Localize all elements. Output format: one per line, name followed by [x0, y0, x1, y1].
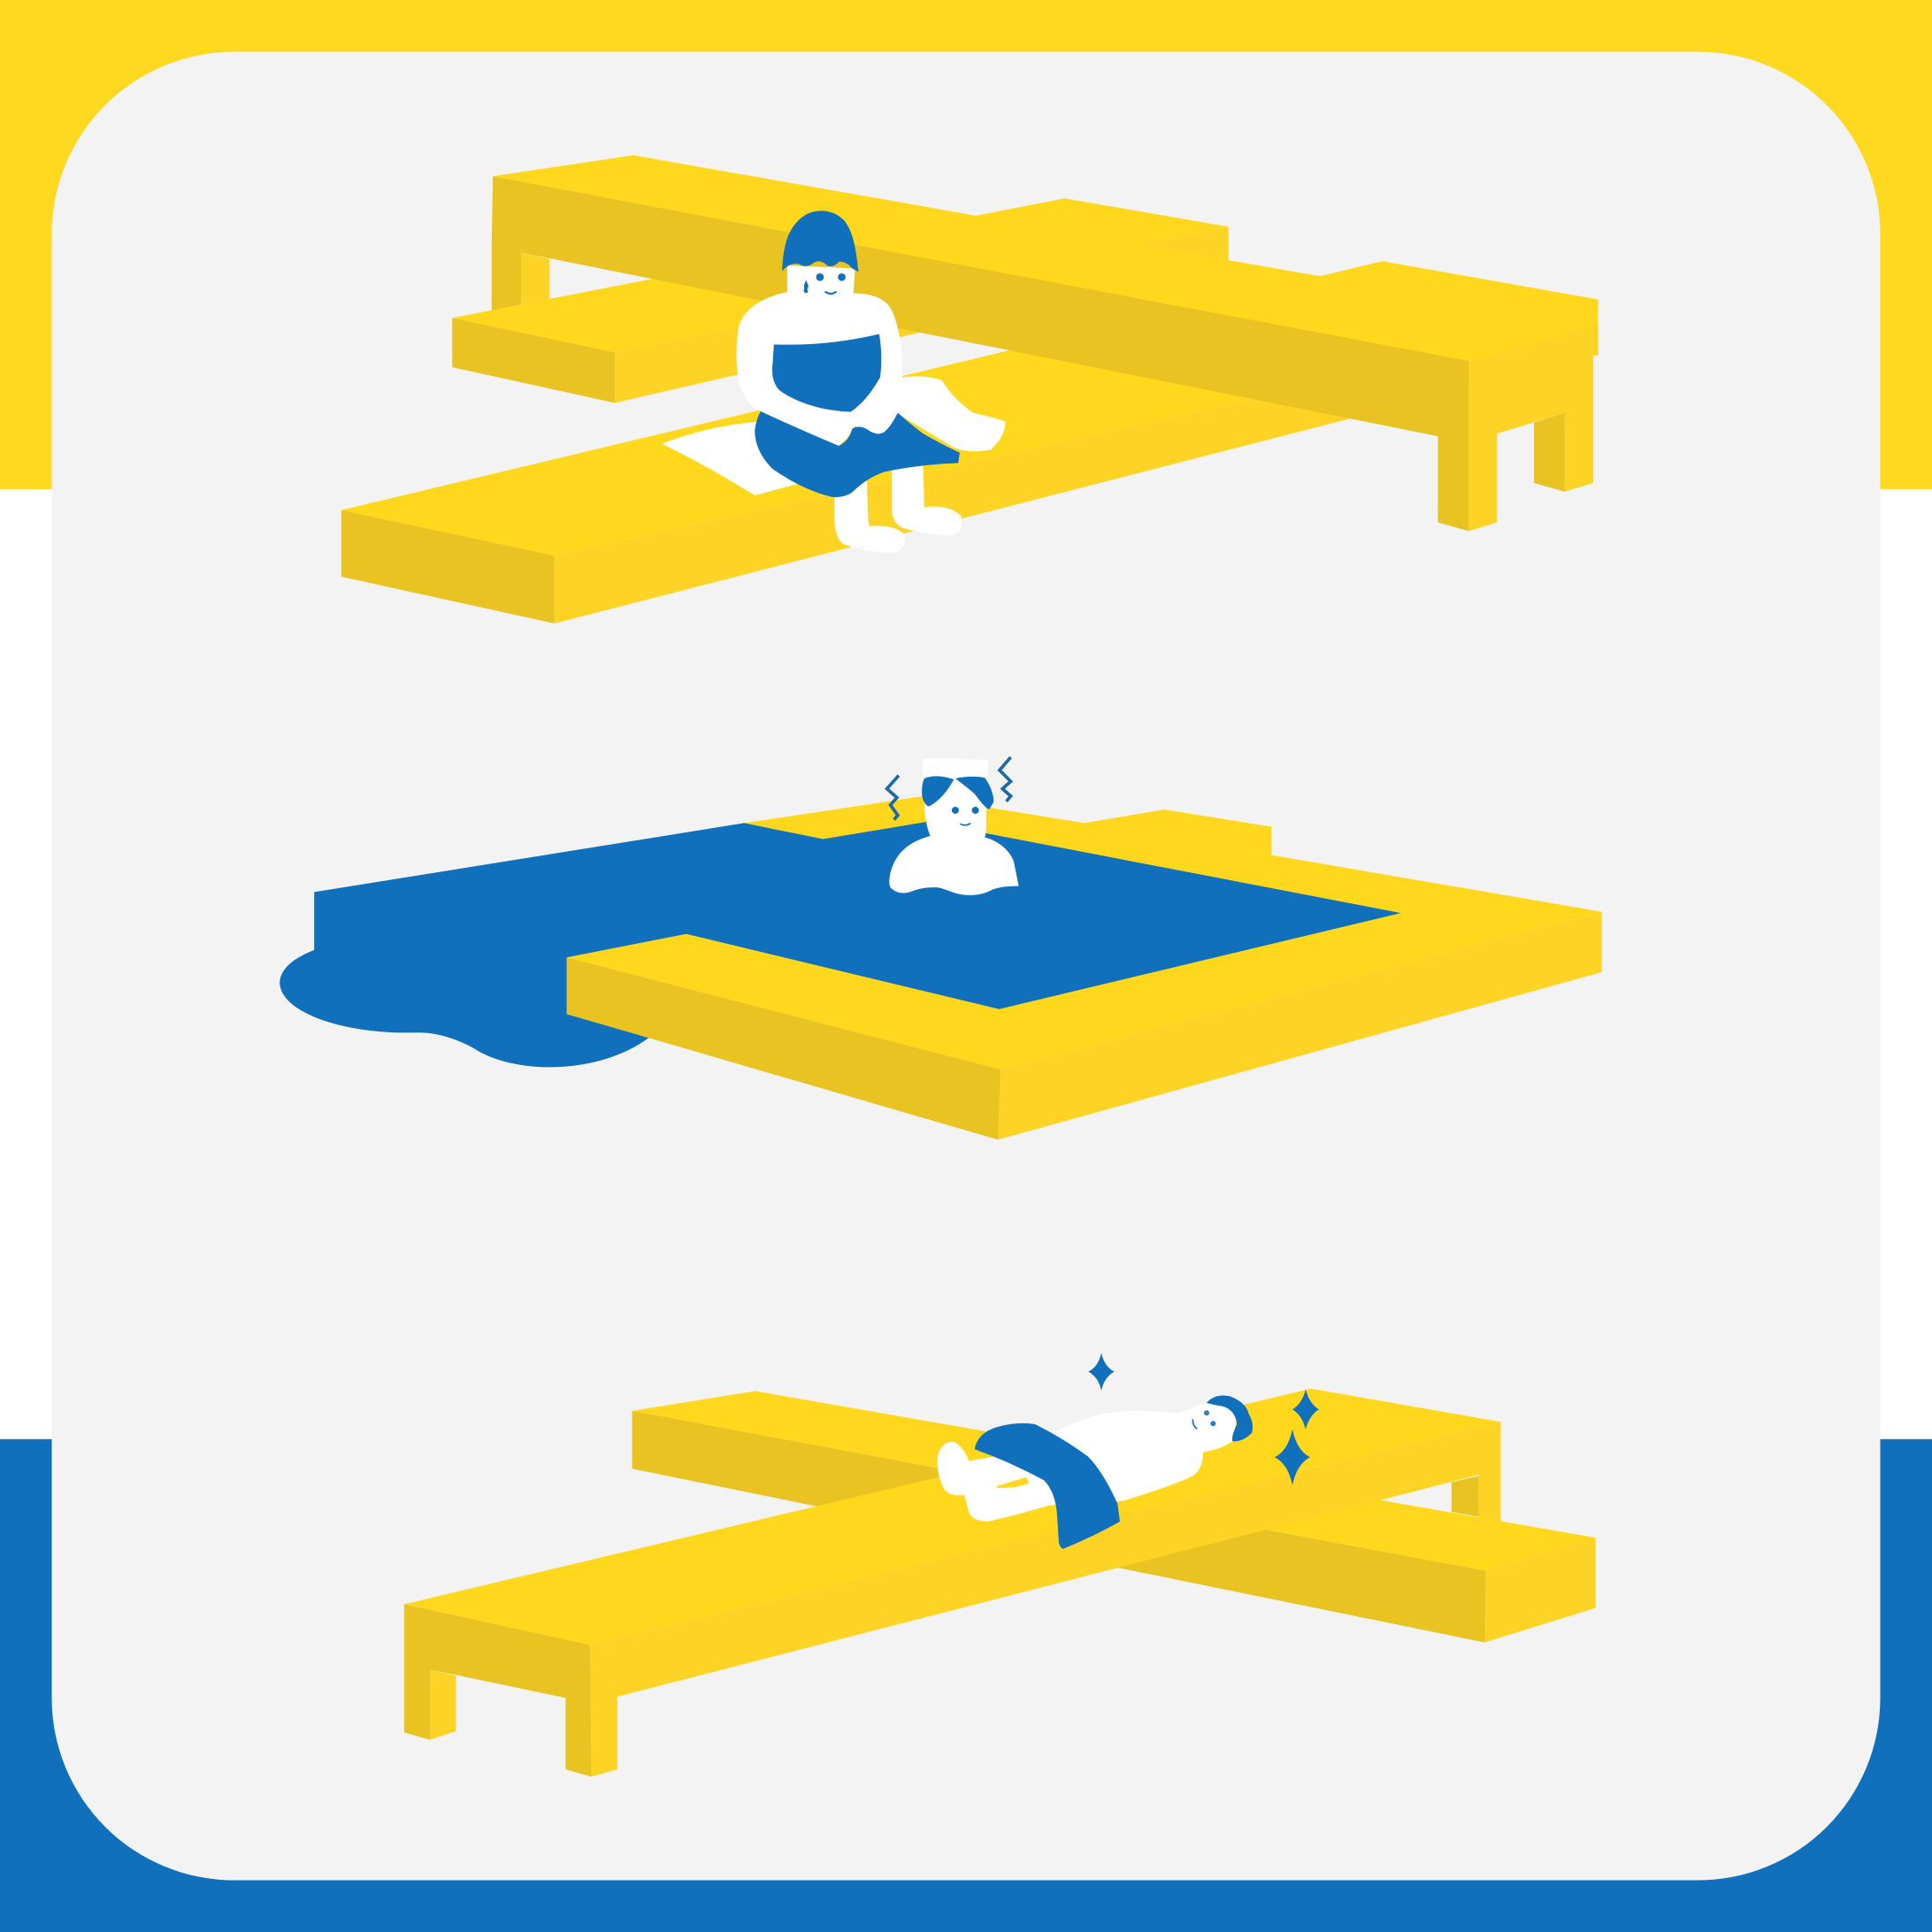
gap between legs	[997, 1477, 1029, 1488]
torso and head	[737, 265, 902, 447]
front lounger	[341, 261, 1598, 624]
hair	[922, 776, 993, 809]
head towel	[923, 759, 988, 777]
pool rim top	[567, 796, 1602, 1070]
scene: person resting on loungers	[341, 156, 1598, 624]
back lounger	[452, 198, 1229, 402]
blue chest towel	[772, 334, 881, 412]
face	[952, 807, 979, 825]
pool rim right side	[998, 912, 1602, 1139]
rear lounger	[632, 1392, 1596, 1643]
face	[1192, 1410, 1215, 1429]
scene: person bathing in pool	[280, 757, 1602, 1139]
figure: bather	[887, 757, 1019, 895]
icon: shiver zigzag marks	[887, 757, 1011, 820]
scene: person lying on lounger	[404, 1353, 1596, 1776]
front leg	[834, 480, 905, 553]
blue towel	[975, 1423, 1120, 1549]
towel sheet on lounger	[662, 422, 799, 495]
raised thigh	[896, 377, 1006, 451]
blue lower towel	[755, 411, 960, 497]
hair	[1207, 1396, 1253, 1441]
face	[803, 273, 846, 294]
figure: reclining person	[938, 1353, 1319, 1549]
main lounger	[404, 1389, 1500, 1776]
water and overflow puddle	[280, 822, 1401, 1067]
body	[938, 1402, 1237, 1522]
lounger rear leg	[1452, 1476, 1478, 1517]
back leg	[892, 457, 962, 535]
pool rim front side	[567, 957, 1000, 1139]
icon: sparkles	[1088, 1353, 1319, 1485]
upper lounger with legs	[492, 156, 1598, 531]
figure: seated person in towel	[662, 211, 1006, 553]
head and shoulders	[889, 776, 1019, 895]
hair	[782, 211, 859, 272]
